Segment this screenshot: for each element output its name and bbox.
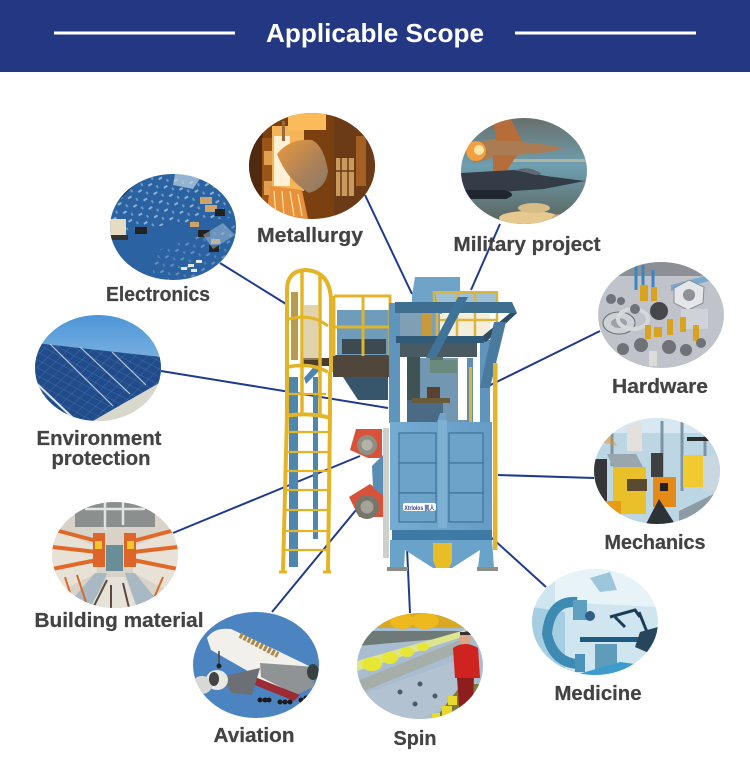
label: Aviation [214,724,294,747]
connector lines [161,195,600,613]
label: Metallurgy [257,224,364,247]
label: Hardware [612,375,708,398]
label: Military project [454,233,601,256]
clouds [499,211,557,224]
upper jet [467,139,564,163]
side motors [349,428,389,558]
photo: fighter jets [461,118,587,225]
label: protection [52,447,150,470]
photo: operating room [532,569,658,675]
right yellow post [493,363,498,550]
photo: solar panels [35,315,161,421]
photo: bolts and washers [598,262,724,368]
panel: spin [357,613,483,750]
photo: warehouse aisle [52,502,178,608]
panel: aviation [192,612,319,747]
interior behind frame [400,313,442,338]
side platform with hopper [303,296,392,400]
photo: factory robots [594,418,720,524]
title: Applicable Scope [266,18,484,48]
blue ladder posts [289,362,322,567]
lower jet [461,170,585,196]
panel: hardware [598,262,724,398]
photo: steel ladle pouring [249,113,375,219]
label: Mechanics [604,531,706,554]
panel: mechanics [594,418,720,554]
panel: medicine [532,569,658,705]
label [36,427,162,470]
panel: building material [34,502,204,632]
door logo: Xtrlolos 凯人 [404,503,435,512]
label: Spin [394,727,436,750]
panel: metallurgy [249,113,375,247]
header band [0,0,750,72]
columns [389,303,400,423]
central machine: shot blasting machine [279,270,517,572]
blasting chamber doors [390,413,492,530]
panel: electronics [106,174,236,306]
label: Electronics [106,283,210,306]
upper housing [412,277,498,304]
label: Building material [34,609,204,632]
machine base and legs [387,530,498,571]
photo: circuit board [110,174,236,280]
panel: environment protection [35,315,162,470]
beams [395,302,517,313]
photo: airliner [192,612,319,718]
panel: military project [454,118,601,256]
label: Medicine [554,682,642,705]
main frame [389,297,517,425]
label: Environment [36,427,162,450]
photo: textile spinning line [357,613,483,719]
yellow ladder with cage [279,270,331,572]
